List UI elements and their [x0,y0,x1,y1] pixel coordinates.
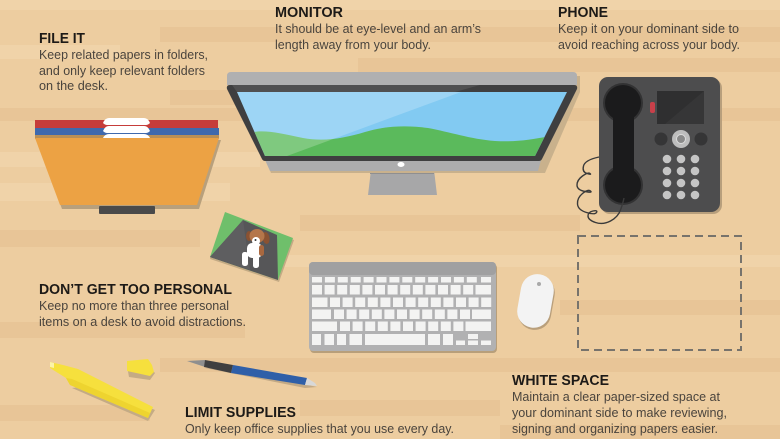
heading and text: white space: WHITE SPACE [512,373,609,389]
heading and text: file it: Keep related papers in folders, [39,48,208,62]
keypad [663,155,699,199]
icon: pen [187,360,317,388]
icon: phone screen [657,91,704,124]
heading and text: monitor: length away from your body. [275,38,431,52]
heading and text: phone: Keep it on your dominant side to [558,22,739,36]
heading and text: white space: signing and organizing papers easier. [512,422,718,436]
heading and text: personal items: items on a desk to avoid distractions. [39,315,246,329]
heading and text: phone: PHONE [558,5,608,21]
heading and text: file it: FILE IT [39,31,85,47]
heading and text: white space: Maintain a clear paper-sized space at [512,390,721,404]
heading and text: white space: your dominant side to make reviewing, [512,406,727,420]
heading and text: monitor [275,5,481,52]
heading and text: limit supplies [185,405,454,436]
icon: highlighter [50,362,155,421]
icon: photo of a dog [210,212,294,282]
heading and text: phone [558,5,740,52]
icon: keyboard [309,262,497,353]
icon: phone cord [577,157,624,223]
heading and text: phone: avoid reaching across your body. [558,38,740,52]
heading and text: monitor: It should be at eye-level and an arm’s [275,22,481,36]
dashed paper space [578,236,741,350]
heading and text: limit supplies: Only keep office supplies that you use every day. [185,422,454,436]
heading and text: personal items [39,282,246,329]
heading and text: personal items: Keep no more than three personal [39,299,229,313]
heading and text: limit supplies: LIMIT SUPPLIES [185,405,296,421]
heading and text: file it: on the desk. [39,79,108,93]
dog [242,229,270,268]
icon: desk phone [577,77,722,223]
heading and text: file it [39,31,208,93]
icon: folders [35,118,221,214]
icon: highlighter cap [127,359,155,380]
heading and text: file it: and only keep relevant folders [39,64,205,78]
icon: mouse [515,271,557,333]
heading and text: white space [512,373,727,436]
heading and text: personal items: DON’T GET TOO PERSONAL [39,282,232,298]
icon: monitor [227,72,580,195]
icon: handset [603,83,643,205]
heading and text: monitor: MONITOR [275,5,344,21]
